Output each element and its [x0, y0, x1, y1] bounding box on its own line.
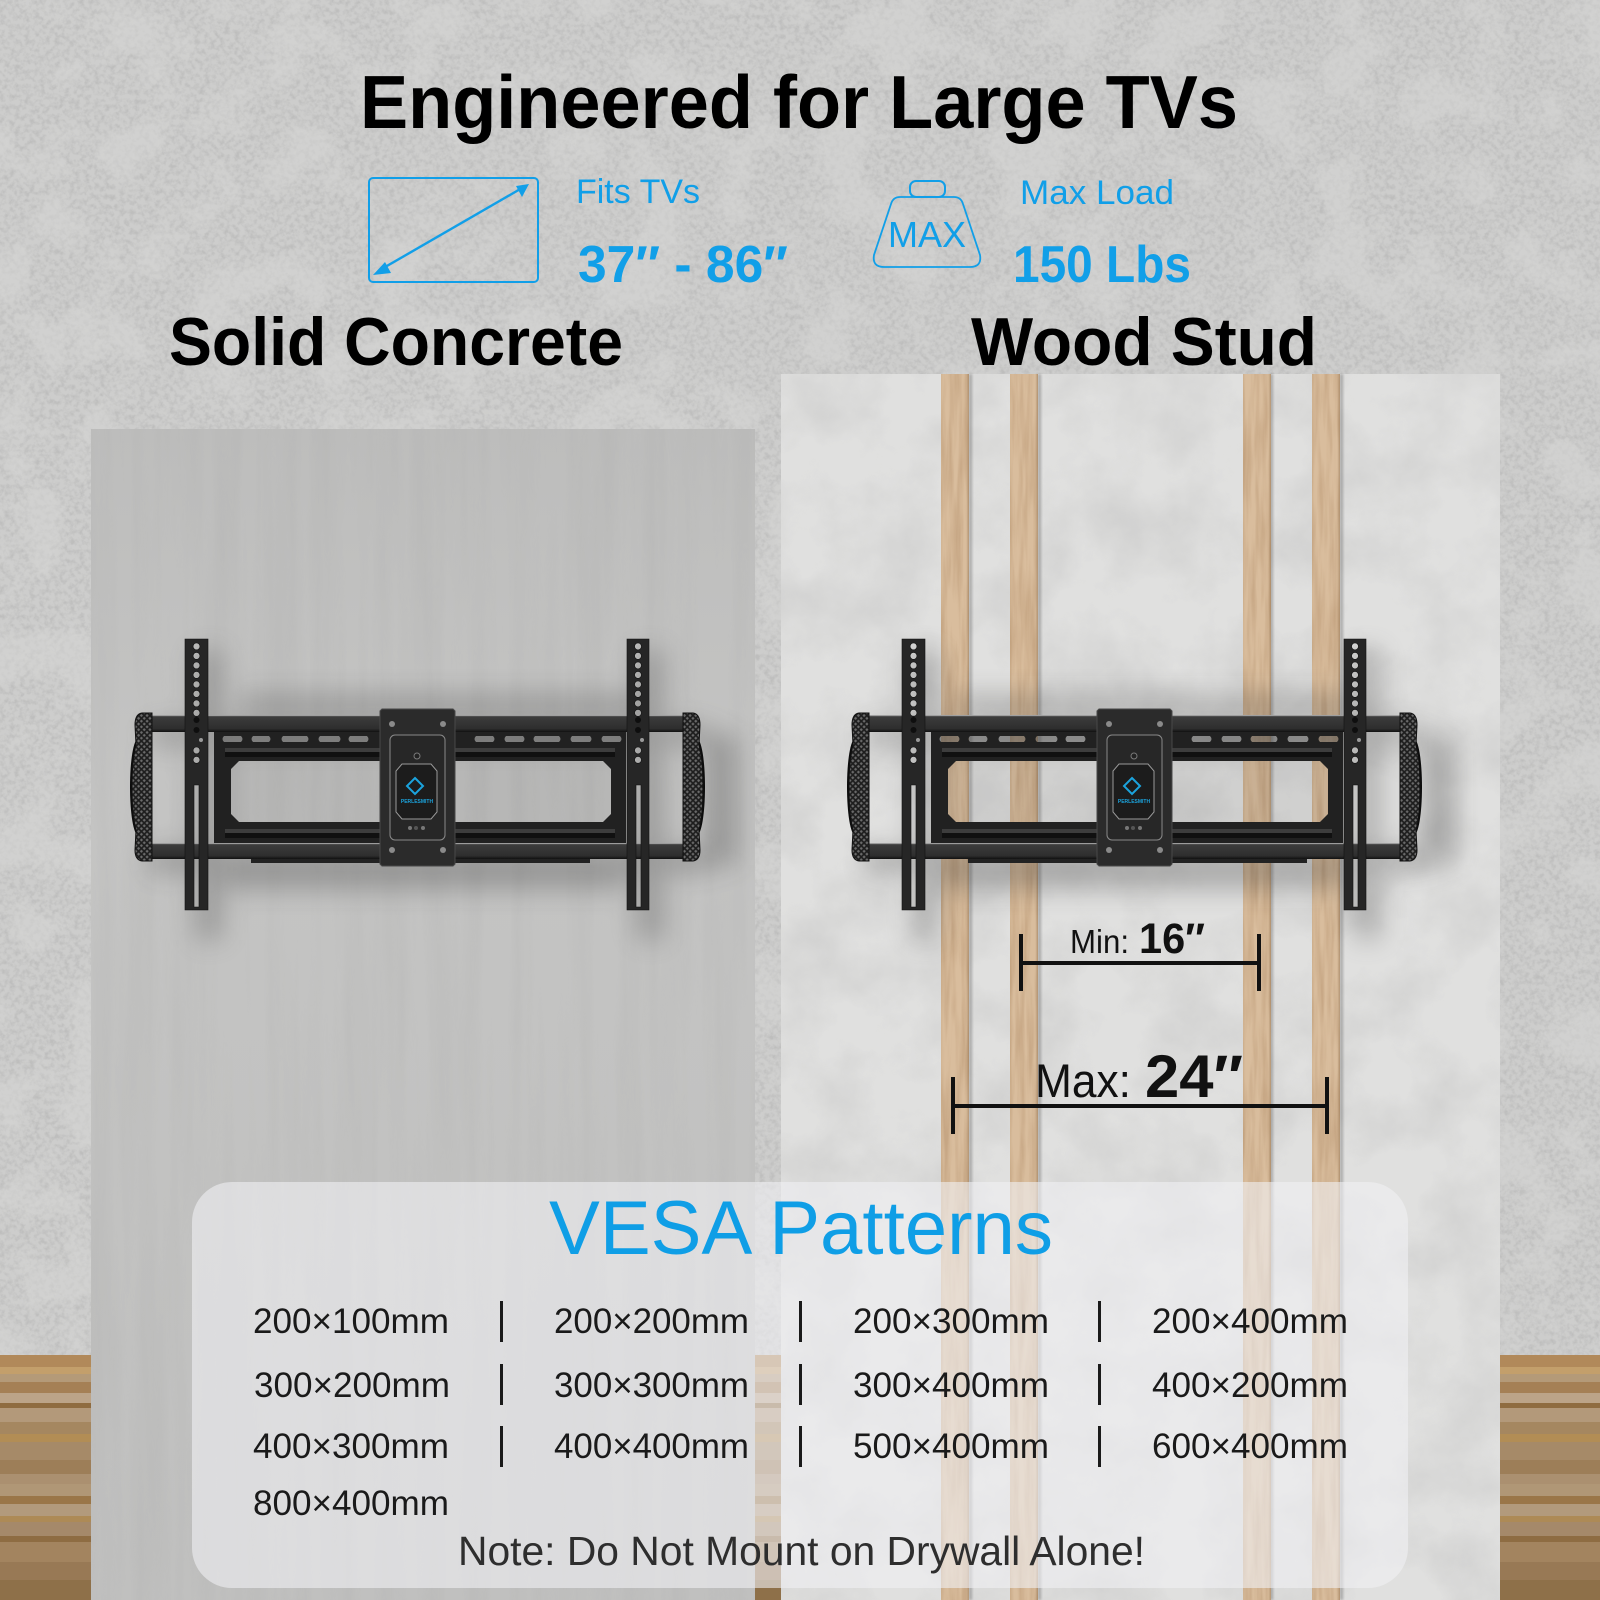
size list row 3: 500×400mm — [853, 1427, 1049, 1466]
minimum stud spacing dimension — [1019, 915, 1261, 991]
maximum stud spacing dimension — [951, 1043, 1329, 1134]
title: Engineered for Large TVs — [360, 60, 1238, 144]
size list row 1 — [253, 1302, 1348, 1341]
panel: solid concrete wall section — [91, 429, 755, 1600]
panel: VESA patterns card — [192, 1182, 1408, 1588]
text: max load value: 150 Lbs — [1013, 236, 1191, 294]
note: Note: Do Not Mount on Drywall Alone! — [458, 1528, 1145, 1574]
size list row 1: 200×200mm — [554, 1302, 749, 1341]
maximum stud spacing dimension: 24″ — [1145, 1043, 1243, 1110]
minimum stud spacing dimension: 16″ — [1139, 915, 1205, 963]
icon: max load weight: MAX — [888, 214, 966, 255]
size list row 1: 200×300mm — [853, 1302, 1049, 1341]
wooden studs — [941, 374, 1343, 1600]
size list row 3: 600×400mm — [1152, 1427, 1348, 1466]
minimum stud spacing dimension: Min: — [1070, 923, 1129, 960]
size list row 2 — [254, 1366, 1348, 1405]
heading: VESA patterns: VESA Patterns — [549, 1186, 1053, 1271]
column dividers — [500, 1301, 1101, 1467]
text: TV size range: 37″ - 86″ — [578, 236, 788, 294]
mount on concrete wall: PERLESMITH — [401, 799, 433, 805]
maximum stud spacing dimension: Max: — [1035, 1054, 1131, 1107]
size list row 3: 400×300mm — [253, 1427, 449, 1466]
mount on wood stud wall — [847, 639, 1454, 940]
panel: wood stud wall section — [781, 374, 1500, 1600]
text: fits TVs label: Fits TVs — [576, 173, 700, 211]
size list row 2: 300×400mm — [853, 1366, 1049, 1405]
text: max load label: Max Load — [1020, 174, 1174, 212]
size list row 1: 200×400mm — [1152, 1302, 1348, 1341]
icon: TV screen size diagonal — [369, 178, 538, 282]
size list row 2: 400×200mm — [1152, 1366, 1348, 1405]
wooden floor — [0, 1355, 1600, 1600]
size list row 3 — [253, 1427, 1348, 1466]
size list row 4: 800×400mm — [253, 1484, 449, 1523]
size list row 3: 400×400mm — [554, 1427, 749, 1466]
heading: wood stud: Wood Stud — [971, 304, 1317, 380]
heading: solid concrete: Solid Concrete — [169, 304, 623, 380]
size list row 1: 200×100mm — [253, 1302, 449, 1341]
icon: max load weight — [874, 181, 980, 267]
mount on wood stud wall: PERLESMITH — [1118, 799, 1150, 805]
mount on concrete wall — [130, 639, 737, 940]
size list row 2: 300×300mm — [554, 1366, 749, 1405]
size list row 2: 300×200mm — [254, 1366, 450, 1405]
